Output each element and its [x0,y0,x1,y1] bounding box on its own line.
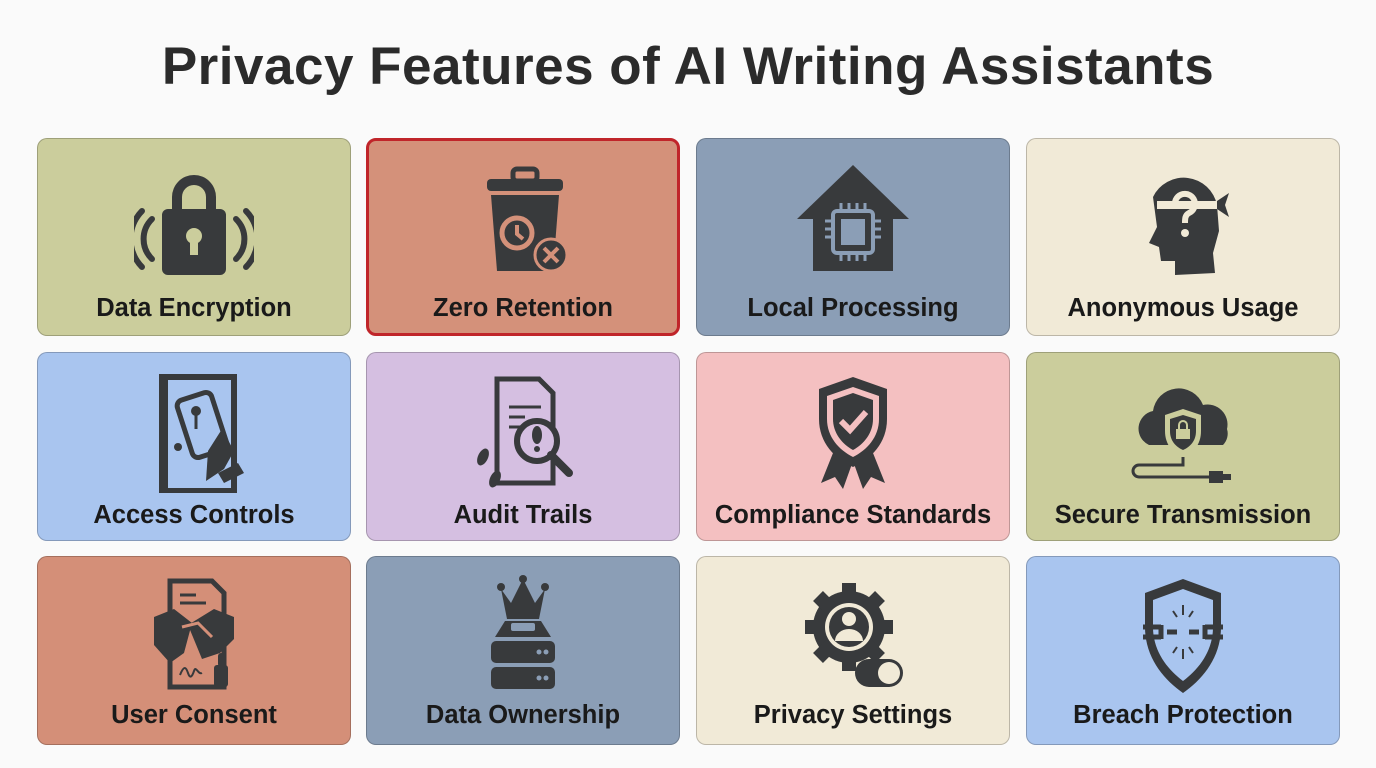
panel: breach protection [1026,556,1340,745]
icon: padlock with waves [134,175,254,275]
title: Privacy Features of AI Writing Assistants [162,37,1214,96]
label: Anonymous Usage [1068,294,1298,322]
panel: privacy settings [696,556,1010,745]
label: Secure Transmission [1055,501,1311,529]
panel: zero retention [366,138,680,336]
icon: document with handshake [154,578,234,690]
icon: trash bin with clock [487,166,566,271]
label: Audit Trails [454,501,592,529]
icon: cloud with lock and cable [1132,388,1231,483]
panel: access controls [37,352,351,541]
panel: user consent [37,556,351,745]
panel: compliance standards [696,352,1010,541]
label: Data Ownership [426,701,620,729]
label: Access Controls [93,501,295,529]
icon: house with chip [797,165,909,271]
panel: audit trails [366,352,680,541]
icon: document with magnifier and footprints [477,376,573,488]
icon: gear with person and toggle [805,583,903,687]
icon: crown over server [491,575,555,689]
label: Zero Retention [433,294,613,322]
panel: data encryption [37,138,351,336]
panel: data ownership [366,556,680,745]
icon: door with keycard [159,374,244,493]
label: Data Encryption [96,294,292,322]
icon: shield with broken chain [1143,579,1223,693]
label: Privacy Settings [754,701,952,729]
label: Local Processing [747,294,959,322]
label: User Consent [111,701,277,729]
icon: shield with checkmark and ribbons [819,377,887,489]
panel: anonymous usage [1026,138,1340,336]
icon: head with question mark [1149,178,1229,275]
panel: local processing [696,138,1010,336]
panel: secure transmission [1026,352,1340,541]
label: Breach Protection [1073,701,1293,729]
label: Compliance Standards [715,501,991,529]
